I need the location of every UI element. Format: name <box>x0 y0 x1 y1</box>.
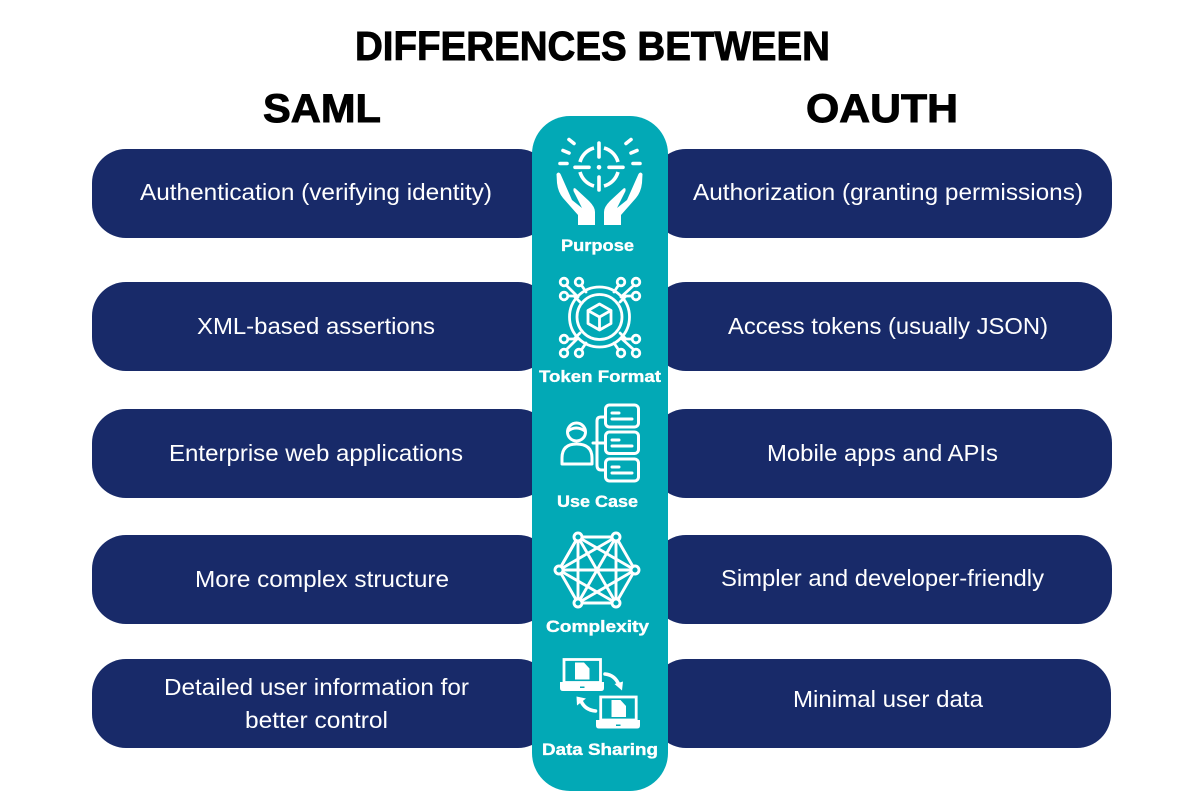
panel: SAML complexity: More complex structure <box>195 566 449 592</box>
heading: OAUTH: OAUTH <box>806 87 958 131</box>
panel: OAuth complexity: Simpler and developer-friendly <box>721 565 1045 591</box>
panel: SAML data sharing: Detailed user information for <box>164 674 469 700</box>
panel: SAML complexity <box>92 535 552 624</box>
panel: SAML token format: XML-based assertions <box>197 313 435 339</box>
panel: OAuth purpose: Authorization (granting permissions) <box>693 179 1083 205</box>
panel: OAuth complexity <box>652 535 1112 624</box>
icon: complexity network <box>555 533 639 607</box>
label: Token Format: Token Format <box>539 368 662 386</box>
panel: OAuth use case <box>652 409 1112 498</box>
panel: SAML data sharing: better control <box>245 707 388 733</box>
label: Complexity: Complexity <box>546 618 650 636</box>
icon: target and hands <box>556 140 642 225</box>
panel: OAuth data sharing <box>652 659 1111 748</box>
label: Data Sharing: Data Sharing <box>542 741 658 759</box>
label: Purpose: Purpose <box>561 237 634 255</box>
panel: SAML purpose: Authentication (verifying identity) <box>140 179 492 205</box>
panel: SAML data sharing <box>92 659 552 748</box>
label: Use Case: Use Case <box>557 493 638 511</box>
panel: OAuth token format: Access tokens (usually JSON) <box>728 313 1048 339</box>
panel: OAuth token format <box>652 282 1112 371</box>
icon: token circuit cube <box>560 278 640 357</box>
title: DIFFERENCES BETWEEN <box>355 23 830 69</box>
panel: OAuth data sharing: Minimal user data <box>793 686 983 712</box>
heading: SAML: SAML <box>263 87 381 131</box>
panel: SAML purpose <box>92 149 552 238</box>
panel: SAML token format <box>92 282 552 371</box>
panel: SAML use case: Enterprise web applications <box>169 440 463 466</box>
panel: OAuth use case: Mobile apps and APIs <box>767 440 998 466</box>
central column <box>532 116 668 791</box>
icon: user with option cards <box>562 405 638 481</box>
panel: SAML use case <box>92 409 552 498</box>
icon: data sharing laptops <box>560 660 640 728</box>
panel: OAuth purpose <box>652 149 1112 238</box>
